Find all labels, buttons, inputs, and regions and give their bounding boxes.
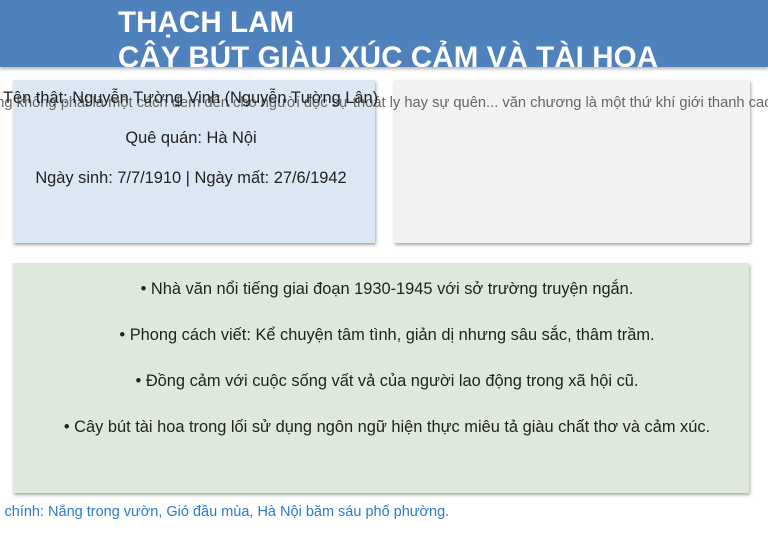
bullet 4: • Cây bút tài hoa trong lối sử dụng ngôn ngữ hiện thực miêu tả giàu chất thơ và cảm xúc.: [64, 418, 710, 436]
text: dates: Ngày sinh: 7/7/1910 | Ngày mất: 27/6/1942: [35, 169, 347, 187]
bullet 1: • Nhà văn nổi tiếng giai đoạn 1930-1945 với sở trường truyện ngắn.: [141, 280, 633, 298]
bullet 2: • Phong cách viết: Kể chuyện tâm tình, giản dị nhưng sâu sắc, thâm trầm.: [119, 326, 655, 344]
panel: highlights: [13, 263, 749, 493]
text: real name: Tên thật: Nguyễn Tường Vinh (Nguyễn Tường Lân): [3, 89, 378, 107]
bullet 3: • Đồng cảm với cuộc sống vất vả của người lao động trong xã hội cũ.: [136, 372, 638, 390]
title: THẠCH LAM: [118, 6, 294, 39]
title: [118, 6, 658, 67]
text: hometown: Quê quán: Hà Nội: [125, 129, 257, 147]
panel: quote: [394, 80, 750, 243]
header banner: [0, 0, 768, 67]
panel: personal info: [13, 80, 375, 243]
